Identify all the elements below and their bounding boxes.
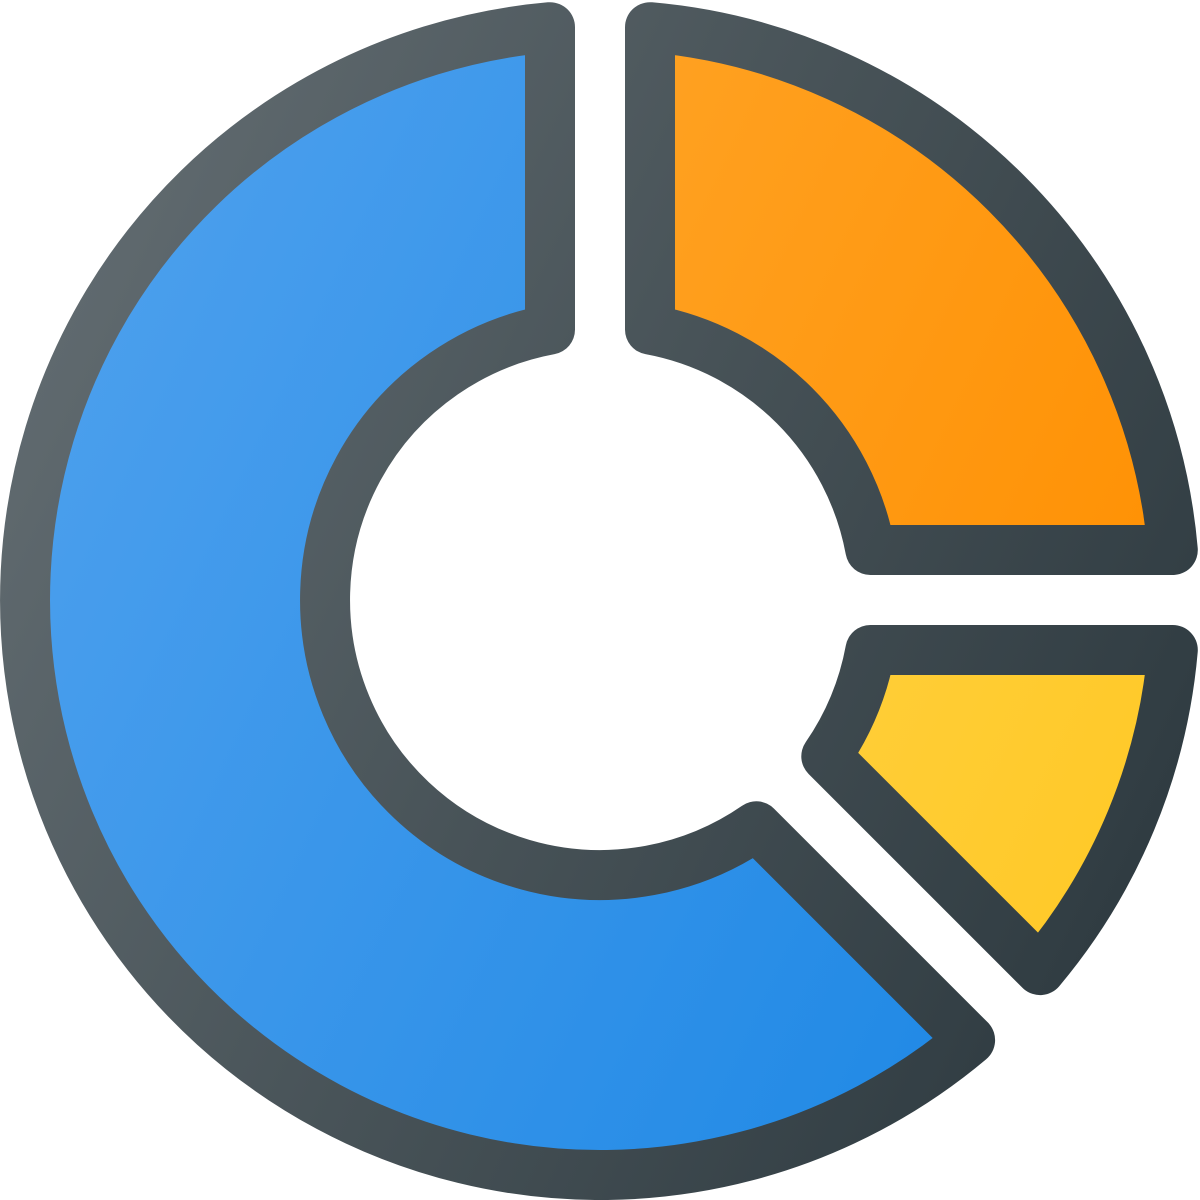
segment: yellow small arc [826,650,1173,970]
segment: blue large arc [25,27,970,1175]
segment: orange quarter arc [650,27,1173,550]
